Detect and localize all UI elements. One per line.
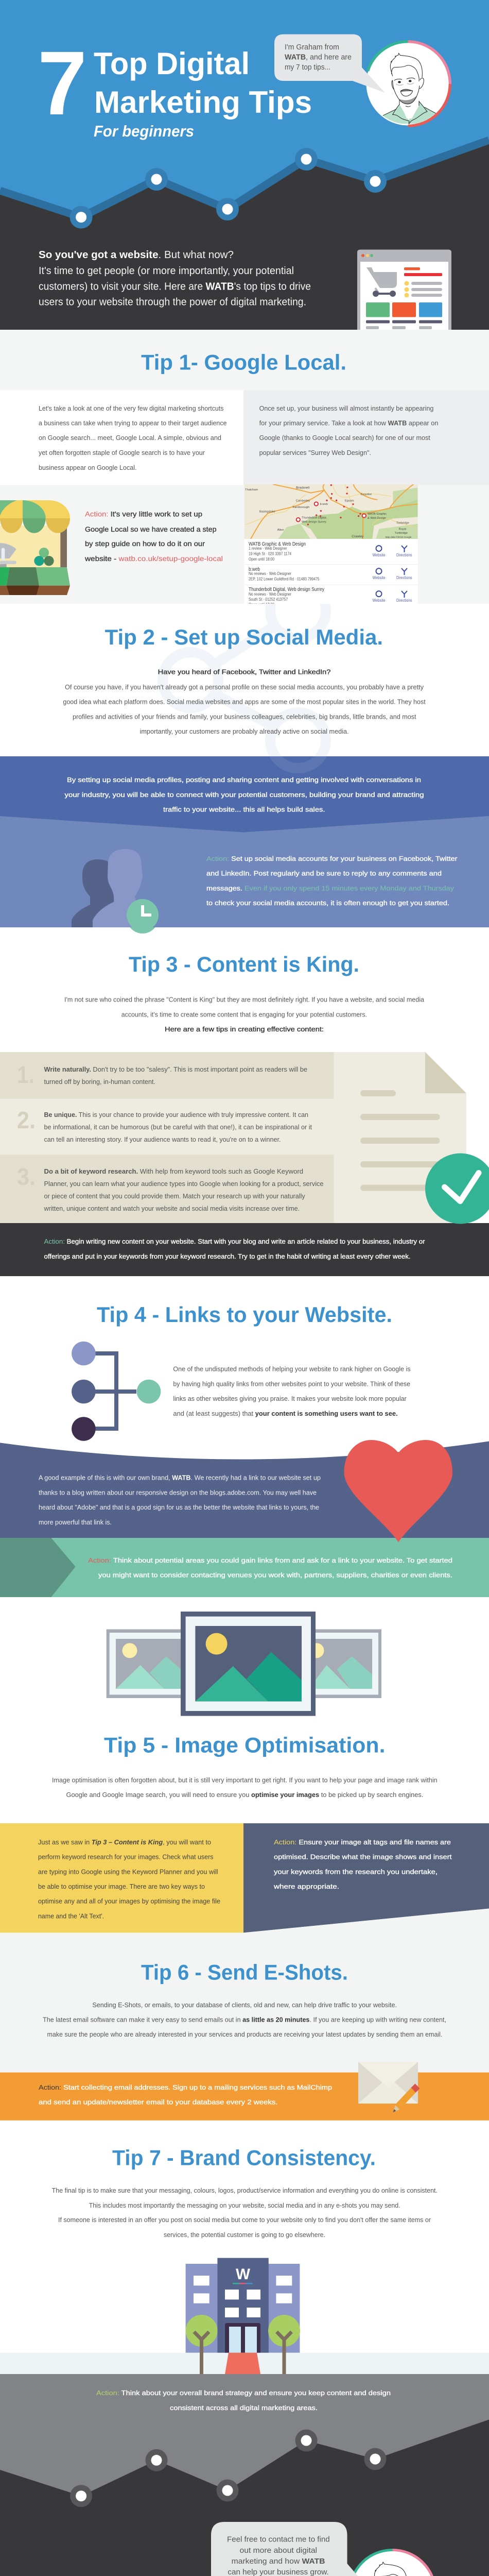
list item 3: written, unique content and watch your website and social media visits increase over time. <box>44 1205 300 1212</box>
action bar: and send an update/newsletter email to your database every 2 weeks. <box>39 2098 277 2106</box>
text: image intro: Image optimisation is often forgotten about, but it is still very important to get right. If you want to help your page and image rank within <box>52 1776 438 1784</box>
search result listings <box>244 539 418 607</box>
icon: office building <box>185 2258 300 2374</box>
text: action Google Local: Action: It's very little work to set up <box>85 510 202 518</box>
search result listings: Open until 18:00 <box>249 556 274 562</box>
panel: tip 4 Links to your Website <box>0 1276 489 1597</box>
map: Google Local results: Alton <box>277 529 284 532</box>
speech bubble closing: out more about digital <box>240 2546 317 2555</box>
panel: keyword research: be able to optimise your image. There are two key ways to <box>38 1883 205 1890</box>
panel: keyword research: optimise any and all of your images by optimising the image file <box>38 1897 220 1905</box>
map: Google Local results: Map data ©2015 Google <box>386 535 412 538</box>
search result listings: b:web <box>249 566 260 572</box>
text: once set up: popular services "Surrey Web Design". <box>259 449 371 456</box>
heading: tip 7: Tip 7 - Brand Consistency. <box>112 2146 376 2170</box>
panel: example <box>0 1442 489 1538</box>
map: Google Local results: Tonbridge <box>396 521 409 524</box>
line chart nodes <box>70 2430 387 2507</box>
search result listings: Directions <box>396 575 412 580</box>
line chart with nodes <box>0 140 489 229</box>
action bar <box>0 2073 489 2121</box>
icon: image frames <box>107 1612 381 1716</box>
text: e-shots intro: make sure the people who are already interested in your services and products are receiving your latest updates by sending them an email. <box>47 2030 442 2038</box>
panel: tip 6 Send E-Shots <box>0 1908 489 2121</box>
text: content intro <box>64 996 425 1033</box>
text: social media intro <box>63 668 426 735</box>
speech bubble: I'm Graham from <box>285 43 339 52</box>
portrait: Graham closing <box>350 2550 435 2576</box>
map: Google Local results: Tunbridge <box>395 532 408 535</box>
heading: tip 5: Tip 5 - Image Optimisation. <box>104 1733 385 1757</box>
list item 2: 2. <box>17 1107 36 1133</box>
title: Top Digital <box>94 46 250 81</box>
text: action Google Local: Google Local so we have created a step <box>85 525 217 533</box>
search result listings: Website <box>373 598 386 603</box>
search result listings: Open until 17:30 <box>249 602 274 607</box>
panel: action image tags: your keywords from the research you undertake, <box>274 1868 438 1876</box>
intro text: So you've got a website . But what now? <box>39 249 234 261</box>
speech bubble: my 7 top tips... <box>285 63 330 72</box>
text: action brand: Action: Think about your overall brand strategy and ensure you keep content and design <box>96 2389 391 2397</box>
icon: document <box>334 1052 466 1223</box>
text: action Google Local <box>84 510 223 563</box>
text: action brand: consistent across all digital marketing areas. <box>170 2404 318 2412</box>
text: action Google Local: website - watb.co.uk/setup-google-local <box>84 554 223 563</box>
text: social media intro: Of course you have, if you haven't already got a personal profile on these social media accounts, you probably have a pretty <box>65 683 424 691</box>
speech bubble closing: marketing and how WATB <box>232 2557 325 2566</box>
text: action social: messages. Even if you only spend 15 minutes every Monday and Thursday <box>206 885 455 892</box>
panel: keyword research <box>0 1823 243 1933</box>
map: Google Local results: Epsom <box>345 499 354 502</box>
action bar: offerings and put in your keywords from your keyword research. Try to get in the habit of writing at least every other week. <box>44 1252 411 1260</box>
heading: tip 4: Tip 4 - Links to your Website. <box>97 1302 392 1327</box>
map: Google Local results: Basingstoke <box>259 511 275 514</box>
list item 3: 3. <box>17 1163 36 1190</box>
list item 2: can tell an interesting story. If your audience wants to read it, you're on to a winner. <box>44 1136 281 1143</box>
text: e-shots intro: Sending E-Shots, or emails, to your database of clients, old and new, can help drive traffic to your website. <box>92 2001 397 2009</box>
title: Marketing Tips <box>94 85 312 120</box>
text: content intro: Here are a few tips in creating effective content: <box>165 1025 324 1033</box>
map: Google Local results: Croydon <box>361 493 372 496</box>
list item 1: 1. <box>17 1061 34 1088</box>
intro text: users to your website through the power of digital marketing. <box>39 297 306 308</box>
panel: example: more powerful that link is. <box>39 1518 112 1526</box>
action bar <box>0 1223 489 1276</box>
title <box>38 33 312 140</box>
text: Google Local intro: a business can take when trying to appear to their target audience <box>39 419 227 427</box>
list item 1: Write naturally. Don't try to be too "salesy". This is most important point as readers will be <box>44 1065 307 1073</box>
text: links intro: and (at least suggests) that your content is something users want to see. <box>173 1410 398 1417</box>
text: brand consistency: services, the potential customer is going to go elsewhere. <box>164 2231 325 2239</box>
list item 3 <box>0 1155 334 1223</box>
speech bubble: WATB, and here are <box>285 53 352 62</box>
heading: tip 6: Tip 6 - Send E-Shots. <box>141 1960 348 1985</box>
text: links intro: One of the undisputed methods of helping your website to rank higher on Google is <box>173 1365 411 1373</box>
text: links intro: by having high quality links from other websites point to your website. Think of these <box>173 1380 410 1388</box>
text: social benefit: your industry, you will be able to connect with your potential customers, building your brand and attracting <box>65 791 424 799</box>
action bar with chevron <box>0 1538 489 1597</box>
action bar: Action: Begin writing new content on your website. Start with your blog and write an article related to your business, industry or <box>44 1238 425 1245</box>
text: Google Local intro: business appear on Google Local. <box>39 464 137 471</box>
text: Google Local intro: Let's take a look at one of the very few digital marketing shortcuts <box>39 404 224 412</box>
panel: action image tags: optimised. Describe what the image shows and insert <box>274 1853 452 1861</box>
list item 3: or piece of content that you could provide them. Match your research up with your naturally <box>44 1192 305 1200</box>
text: brand consistency: This includes most importantly the messaging on your website, social media and in any e-shots you may send. <box>89 2201 400 2209</box>
text: Google Local intro: on Google search... meet, Google Local. A simple, obvious and <box>39 434 221 442</box>
intro text <box>39 249 311 308</box>
text: brand consistency: The final tip is to make sure that your messaging, colours, logos, product/service information and everything you do online is consistent. <box>52 2187 438 2194</box>
map: Google Local results: & Web Design <box>368 517 386 520</box>
panel: example: heard about "Adobe" and that is a good sign for us as the better the website that links to yours, the <box>39 1503 319 1511</box>
list item 3: Planner, you can learn what your audience types into Google when looking for a product, service <box>44 1180 323 1188</box>
text: action Google Local: by step guide on how to do it on our <box>85 539 205 548</box>
text: content intro: I'm not sure who coined the phrase "Content is King" but they are most definitely right. If you have a website, and social media <box>64 996 425 1004</box>
text: e-shots intro: The latest email software can make it very easy to send emails out in as little as 20 minutes. If you are keeping up with writing new content, <box>43 2015 446 2023</box>
panel: tip 1 Google Local <box>0 330 489 607</box>
panel: keyword research: are typing into Google using the Keyword Planner and you will <box>38 1868 218 1876</box>
search result listings: No reviews · Web Designer <box>249 591 291 597</box>
clock overflow <box>130 927 155 934</box>
map: Google Local results: Royal <box>399 528 406 531</box>
search result listings: No reviews · Web Designer <box>249 571 291 576</box>
text: social benefit: By setting up social media profiles, posting and sharing content and getting involved with conversations in <box>67 776 421 784</box>
search result listings: South St · 01252 413757 <box>249 597 288 602</box>
text: once set up: Google (thanks to Google Local search) for one of our most <box>259 434 430 442</box>
panel: example: A good example of this is with our own brand, WATB. We recently had a link to our website set up <box>39 1474 321 1482</box>
text: social media intro: Have you heard of Facebook, Twitter and LinkedIn? <box>158 668 330 676</box>
search result listings: WATB Graphic & Web Design <box>249 541 306 547</box>
heading: tip 1: Tip 1- Google Local. <box>141 350 346 374</box>
map: Google Local results: Thatcham <box>245 488 258 492</box>
panel: tip 7 Brand Consistency <box>0 2121 489 2374</box>
icon: envelope and pencil <box>358 2062 418 2112</box>
panel: action image tags: where appropriate. <box>273 1883 339 1890</box>
text: links intro: links as other websites giving you praise. It makes your website look more popular <box>173 1395 407 1402</box>
text: action social: Action: Set up social media accounts for your business on Facebook, Twitter <box>206 855 458 862</box>
map: Google Local results: b:web <box>320 503 328 506</box>
heading: tip 2: Tip 2 - Set up Social Media. <box>105 625 383 649</box>
panel: action image tags <box>243 1823 489 1933</box>
panel: action image tags: Action: Ensure your image alt tags and file names are <box>274 1838 451 1846</box>
panel: keyword research: Just as we saw in Tip 3 – Content is King, you will want to <box>38 1838 211 1846</box>
text: image intro: Google and Google Image search, you will need to ensure you optimise your images to be picked up by search engines. <box>66 1791 423 1799</box>
text: social media intro: importantly, your customers are probably already active on social media. <box>140 727 349 735</box>
map: Google Local results: Camberley <box>296 500 310 503</box>
map: Google Local results: Crawley <box>352 535 364 538</box>
search result listings: Directions <box>396 598 412 603</box>
action bar with chevron: Action: Think about potential areas you could gain links from and ask for a link to your website. To get started <box>88 1556 452 1564</box>
panel: keyword research: perform keyword research for your images. Check what users <box>38 1853 214 1861</box>
map: Google Local results: Bracknell <box>296 486 309 490</box>
speech bubble closing: Feel free to contact me to find <box>227 2535 330 2544</box>
action bar: Action: Start collecting email addresses. Sign up to a mailing services such as MailChimp <box>39 2083 332 2091</box>
text: action social: and LinkedIn. Post regularly and be sure to reply to any comments and <box>206 870 442 877</box>
search result listings: 2EP, 102 Lower Guildford Rd · 01483 799475 <box>249 576 320 581</box>
icon: check mark <box>425 1153 489 1224</box>
search result listings: Thunderbolt Digital, Web design Surrey <box>249 586 325 592</box>
text: social media intro: profiles and activities of your friends and family, your business colleagues, celebrities, big brands, little brands, and most <box>73 713 416 720</box>
text: once set up: for your primary service. Take a look at how WATB appear on <box>259 419 439 427</box>
text: social media intro: good idea what each platform does. Social media websites and apps are some of the most popular sites in the world. They host <box>63 698 426 706</box>
search result listings: Directions <box>396 552 412 557</box>
icon: market stall <box>0 500 70 595</box>
panel: tip 5 Image Optimisation <box>0 1597 489 1933</box>
watermark: share icon <box>163 583 326 768</box>
search result listings: Website <box>373 552 386 557</box>
panel: keyword research: name and the 'Alt Text'. <box>38 1912 104 1920</box>
heading: tip 3: Tip 3 - Content is King. <box>129 952 359 976</box>
search result listings: 1 review · Web Designer <box>249 546 287 551</box>
text: action brand <box>96 2389 391 2412</box>
text: Google Local intro: yet often forgotten staple of Google search is to have your <box>39 449 205 456</box>
text: links intro <box>173 1365 411 1417</box>
list item 3: Do a bit of keyword research. With help from keyword tools such as Google Keyword <box>44 1167 303 1175</box>
text: brand consistency: If someone is interested in an offer you post on social media but come to your website only to find you don't offer the same items or <box>58 2216 431 2224</box>
text: once set up: Once set up, your business will almost instantly be appearing <box>259 404 433 412</box>
map: Google Local results: Farnborough <box>293 506 309 509</box>
icon: people and clock <box>72 849 159 931</box>
map: Google Local results <box>244 484 418 539</box>
text: content intro: accounts, it's time to create some content that is engaging for your potential customers. <box>121 1011 367 1018</box>
text: once set up <box>259 404 439 456</box>
text: social benefit <box>65 776 424 813</box>
icon: heart <box>344 1440 452 1543</box>
text: action social: to check your social media accounts, it is often enough to get you started. <box>206 899 449 907</box>
list item 2: be informational, it can be humorous (but be careful with that one!), it can be inspirational or it <box>44 1123 312 1131</box>
intro text: It's time to get people (or more importantly, your potential <box>39 265 294 277</box>
search result listings: Website <box>373 575 386 580</box>
speech bubble <box>274 34 385 93</box>
panel: tip 2 Set up Social Media <box>0 583 489 931</box>
text: image intro <box>52 1776 438 1799</box>
list item 1 <box>0 1052 334 1099</box>
panel: footer closing <box>0 2374 489 2576</box>
map: Google Local results: Thunderbolt Digital, <box>302 516 327 519</box>
text: e-shots intro <box>43 2001 446 2038</box>
portrait: Graham <box>366 42 450 126</box>
list item 2 <box>0 1099 334 1155</box>
panel: hero header <box>0 0 489 330</box>
list item 1: turned off by boring, in-human content. <box>44 1078 155 1086</box>
text: social benefit: traffic to your website... this all helps build sales. <box>163 806 325 813</box>
map: Google Local results: WATB Graphic <box>368 513 387 516</box>
panel: tip 3 Content is King <box>0 927 489 1276</box>
icon: office building: W <box>236 2266 251 2283</box>
action bar with chevron: you might want to consider contacting venues you work with, partners, suppliers, charities or even clients. <box>98 1571 452 1579</box>
panel: example: thanks to a blog written about our responsive design on the blogs.adobe.com. You may well have <box>39 1489 317 1497</box>
search result listings: 19 High St · 020 3397 1174 <box>249 551 291 556</box>
text: brand consistency <box>52 2187 438 2239</box>
list item 2: Be unique. This is your chance to provide your audience with truly impressive content. It can <box>44 1111 308 1118</box>
icon: browser with shopping cart <box>357 249 451 330</box>
map: Google Local results: Web design Surrey <box>302 521 326 524</box>
speech bubble closing <box>211 2522 373 2576</box>
text: Google Local intro <box>39 404 227 471</box>
title: For beginners <box>94 122 194 140</box>
text: action social <box>206 855 458 907</box>
intro text: customers) to visit your site. Here are WATB's top tips to drive <box>39 281 311 293</box>
title: 7 <box>38 33 87 134</box>
diagram: link nodes <box>72 1342 161 1441</box>
